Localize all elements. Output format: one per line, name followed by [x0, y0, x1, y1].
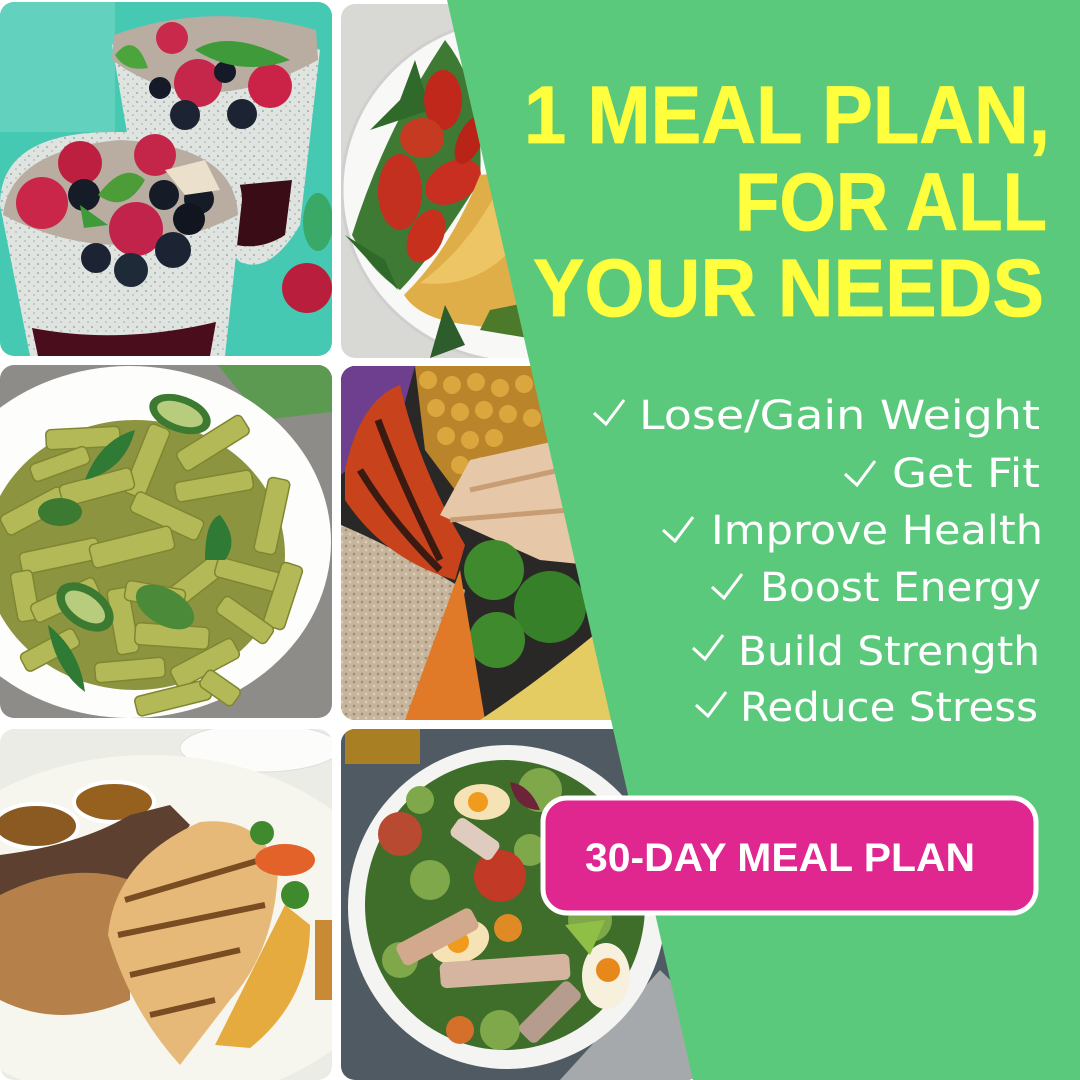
item: Lose/Gain Weight: Lose/Gain Weight — [639, 393, 1040, 439]
item: Boost Energy: Boost Energy — [760, 565, 1041, 611]
photo: omelette with tomatoes — [341, 4, 528, 358]
title: YOUR NEEDS — [533, 243, 1044, 334]
photo: salad plate with eggs — [341, 729, 701, 1080]
green diagonal panel — [447, 0, 1080, 1080]
photo: chia pudding with berries — [0, 2, 333, 356]
call-to-action button: 30-DAY MEAL PLAN — [585, 836, 975, 880]
benefits checklist — [594, 393, 1043, 731]
item: Improve Health: Improve Health — [711, 508, 1043, 554]
item: Reduce Stress: Reduce Stress — [740, 685, 1038, 731]
item: Get Fit — [845, 451, 1040, 497]
title: 1 MEAL PLAN, — [524, 70, 1050, 161]
item: Build Strength: Build Strength — [738, 629, 1040, 675]
photo: protein bowl with chickpeas and broccoli — [341, 366, 641, 720]
item: Get Fit: Get Fit — [892, 451, 1040, 497]
title — [524, 70, 1050, 334]
photo: pesto penne with courgette — [0, 365, 332, 718]
title: FOR ALL — [735, 157, 1047, 248]
photo: grilled chicken and steak — [0, 729, 332, 1080]
call-to-action button — [543, 798, 1036, 913]
